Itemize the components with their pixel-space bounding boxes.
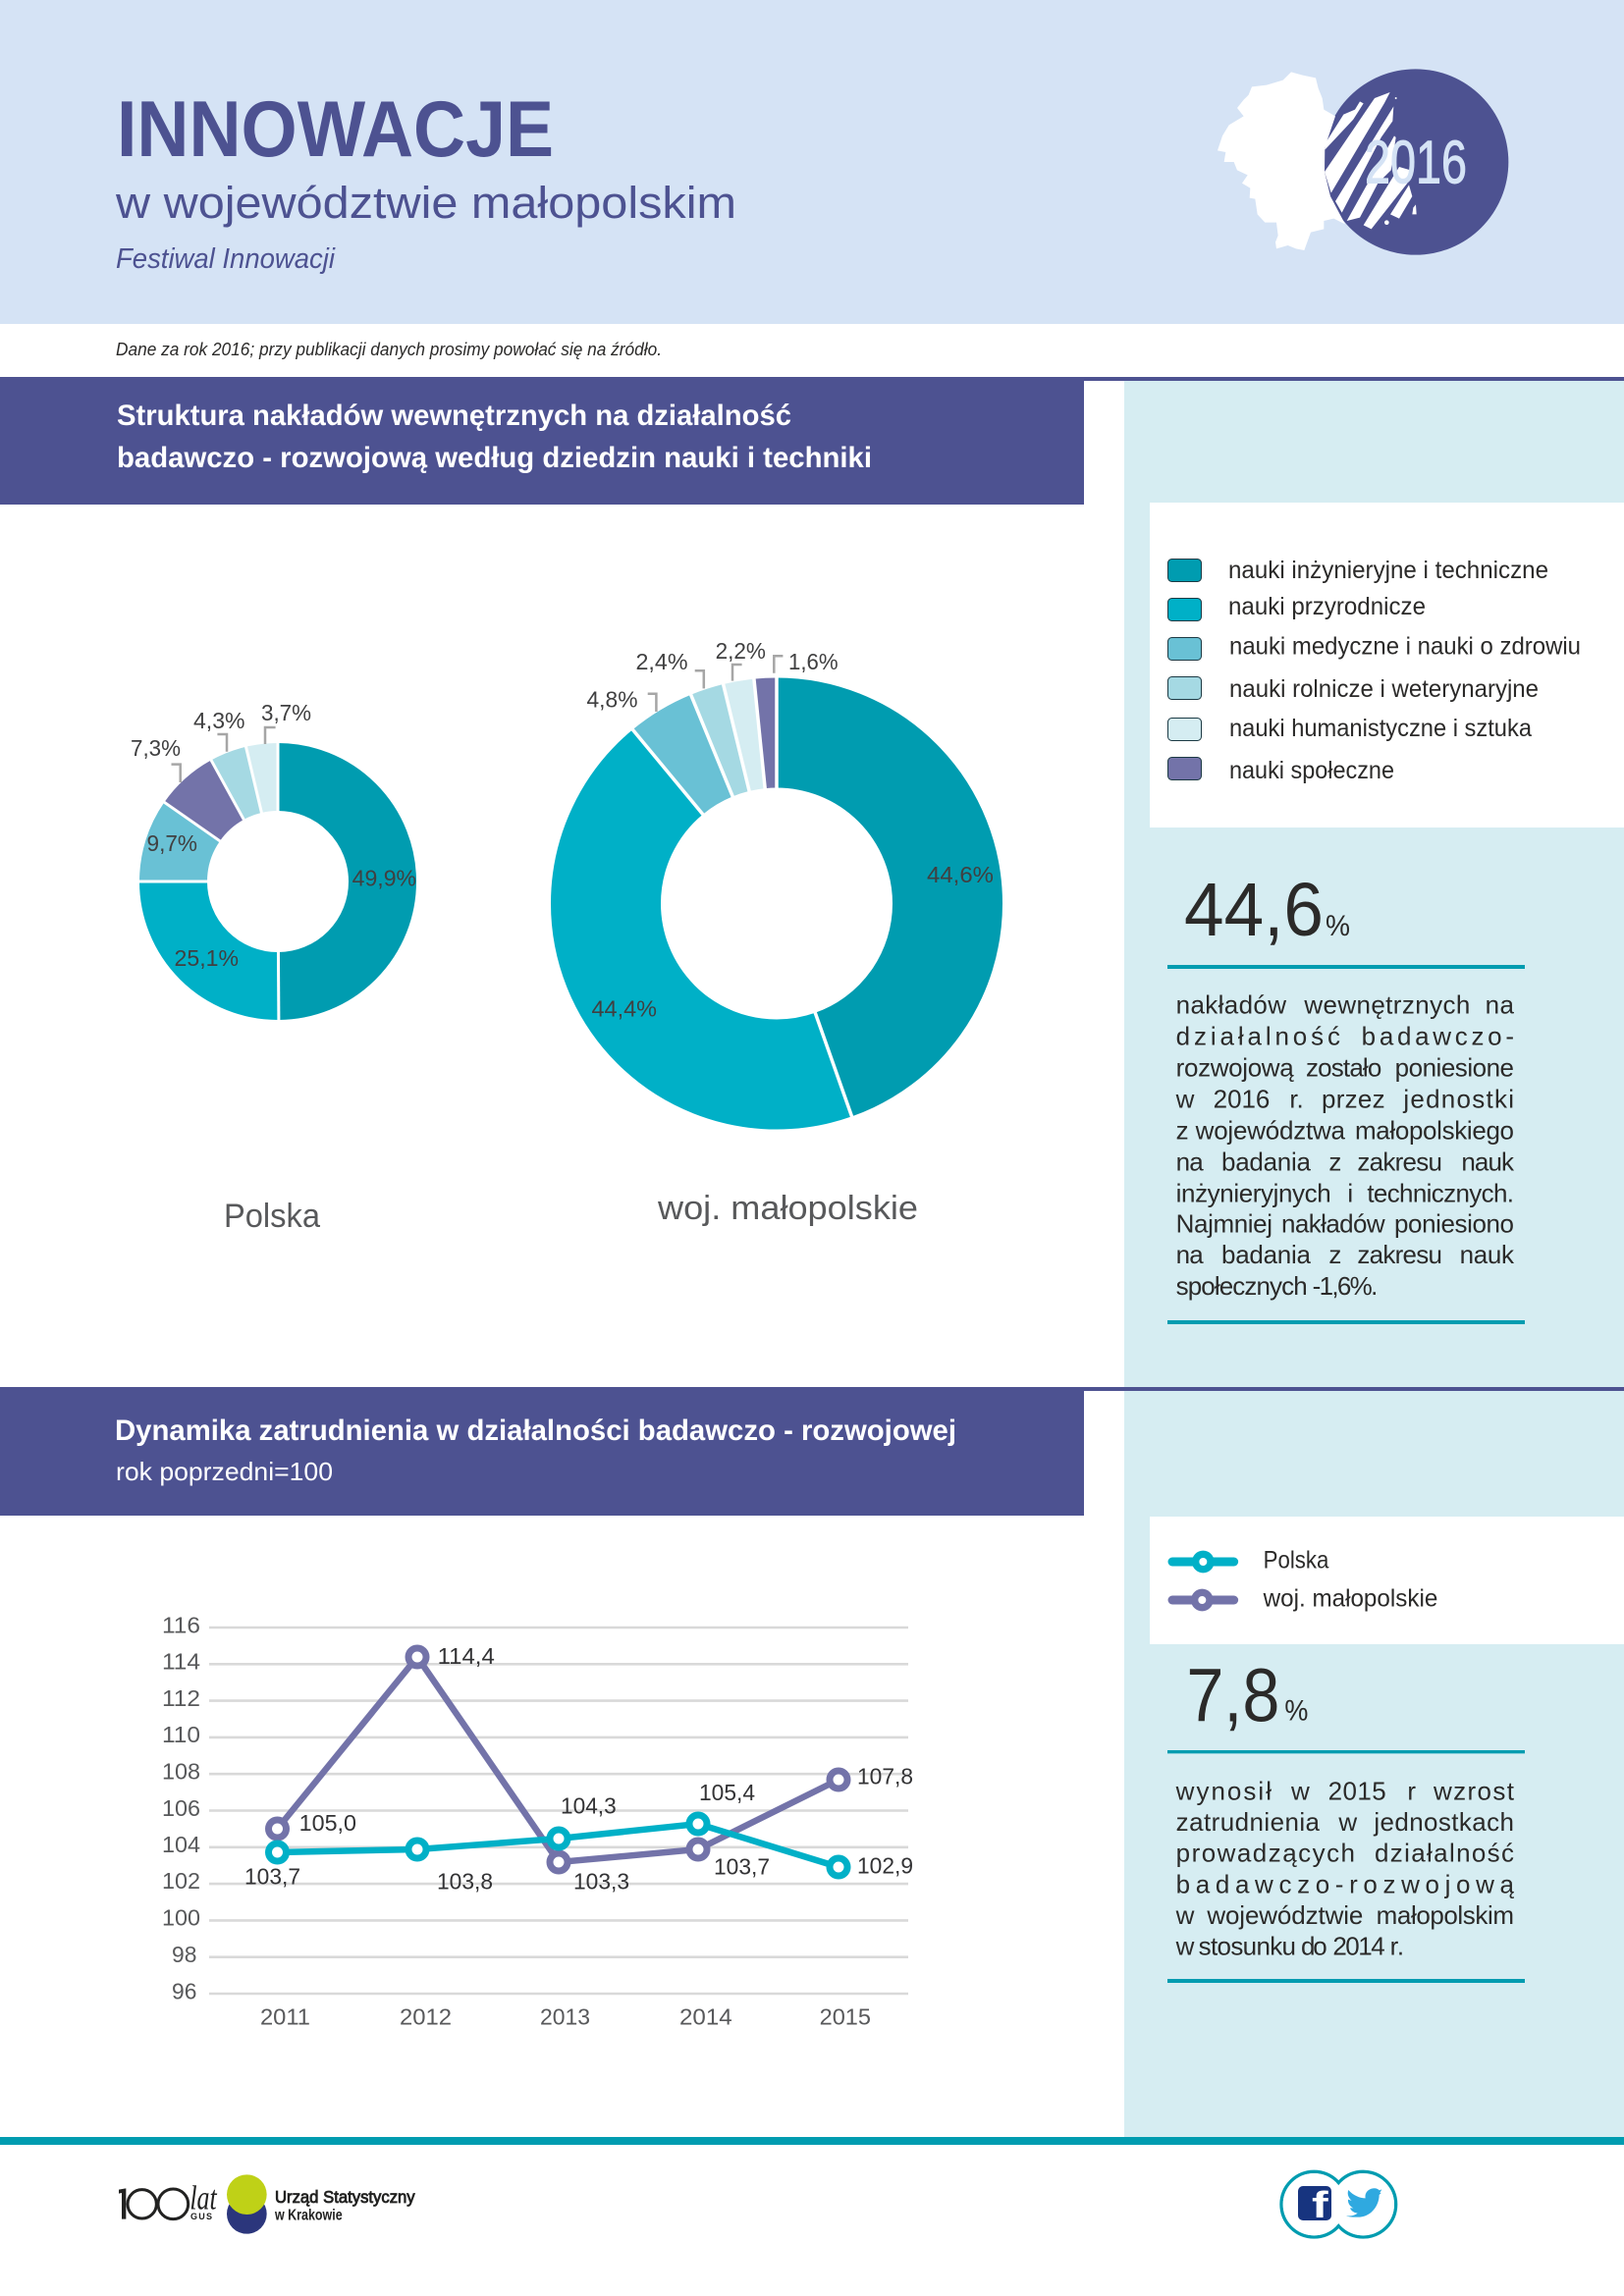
- text block: 44,6% description: nakładów: [1281, 1208, 1385, 1238]
- text block: 44,6% description: społecznych: [1176, 1271, 1308, 1301]
- data labels: 105,0: [299, 1810, 356, 1836]
- logo: Urząd Statystyczny w Krakowie: Urząd Statystyczny: [275, 2187, 415, 2207]
- text block: 7,8% description: zatrudnienia: [1176, 1807, 1321, 1837]
- logo: Urząd Statystyczny w Krakowie: w Krakowie: [274, 2208, 343, 2224]
- donut chart: woj. małopolskie: 1,6%: [788, 649, 839, 674]
- legend item: Polska: Polska: [1264, 1546, 1329, 1574]
- x axis labels: [260, 2004, 871, 2030]
- text block: 7,8% description: małopolskim: [1377, 1900, 1514, 1930]
- text block: 44,6% description: [1175, 989, 1515, 1301]
- text block: 44,6% description: zostało: [1306, 1053, 1381, 1083]
- text block: 7,8% description: w: [1175, 1900, 1195, 1930]
- chart caption: Polska: Polska: [224, 1198, 320, 1235]
- text block: 44,6% description: na: [1176, 1147, 1204, 1176]
- data labels: 102,9: [857, 1852, 913, 1878]
- text block: 44,6% description: inżynieryjnych: [1176, 1178, 1331, 1207]
- text block: 44,6% description: w: [1175, 1085, 1195, 1114]
- donut chart: woj. małopolskie: 2,2%: [716, 638, 766, 664]
- logo: 100 lat GUS: lat: [189, 2179, 218, 2217]
- text block: 44,6% description: nauk: [1460, 1240, 1515, 1269]
- logo: Urząd Statystyczny w Krakowie: [227, 2174, 415, 2234]
- x axis labels: 2014: [679, 2004, 732, 2030]
- callout: 7,8%: 7,8: [1186, 1653, 1279, 1737]
- text block: 7,8% description: 2014: [1332, 1932, 1385, 1961]
- title: INNOWACJE: [117, 85, 554, 174]
- legend item: medical: nauki medyczne i nauki o zdrowiu: [1229, 633, 1581, 661]
- data labels: 104,3: [561, 1792, 617, 1818]
- donut chart: Polska: 49,9%: [352, 866, 416, 891]
- chart caption: woj. małopolskie: woj. małopolskie: [657, 1190, 918, 1227]
- text block: 7,8% description: jednostkach: [1373, 1807, 1514, 1837]
- event name: Festiwal Innowacji: [116, 243, 336, 275]
- text block: 44,6% description: badania: [1221, 1147, 1312, 1176]
- donut chart: Polska: 7,3%: [131, 735, 181, 761]
- subheading: rok poprzedni=100: [116, 1457, 333, 1486]
- line chart: employment dynamics: [162, 1612, 913, 2030]
- icon: facebook: f: [1312, 2184, 1328, 2226]
- donut chart: woj. małopolskie: 4,8%: [587, 686, 638, 712]
- text block: 44,6% description: -1,6%.: [1313, 1271, 1378, 1301]
- y axis labels: 104: [162, 1832, 200, 1857]
- callout: 44,6%: 44,6: [1184, 868, 1324, 952]
- text block: 7,8% description: działalność: [1375, 1839, 1514, 1868]
- donut chart: woj. małopolskie: 44,6%: [927, 862, 994, 887]
- text block: 44,6% description: rozwojową: [1176, 1053, 1294, 1083]
- panel: line chart legend: [1150, 1517, 1624, 1644]
- text block: 44,6% description: jednostki: [1402, 1085, 1514, 1114]
- legend item: social: nauki społeczne: [1229, 757, 1394, 784]
- y axis labels: 96: [172, 1979, 196, 2004]
- text block: 44,6% description: nakładów: [1176, 989, 1286, 1019]
- data labels: 114,4: [438, 1643, 495, 1669]
- x axis labels: 2013: [540, 2004, 590, 2030]
- donut chart: woj. małopolskie: 2,4%: [636, 649, 687, 674]
- text block: 7,8% description: w: [1337, 1807, 1357, 1837]
- text block: 44,6% description: zakresu: [1357, 1240, 1442, 1269]
- text block: 44,6% description: małopolskiego: [1355, 1115, 1514, 1145]
- text block: 7,8% description: stosunku: [1199, 1932, 1296, 1961]
- text block: 44,6% description: działalność: [1176, 1021, 1340, 1050]
- data labels: 107,8: [857, 1764, 913, 1789]
- text block: 44,6% description: 2016: [1214, 1085, 1270, 1114]
- series: Polska: [269, 1815, 847, 1876]
- data labels: 103,3: [573, 1868, 629, 1894]
- text block: 44,6% description: badania: [1221, 1240, 1312, 1269]
- text block: 7,8% description: wzrost: [1433, 1776, 1515, 1805]
- icon: social media facebook and twitter: [1281, 2171, 1396, 2237]
- legend item: woj. małopolskie: [1172, 1585, 1437, 1613]
- y axis labels: 102: [162, 1868, 200, 1894]
- text block: 44,6% description: Najmniej: [1176, 1208, 1272, 1238]
- donut chart: woj. małopolskie: [587, 638, 994, 1120]
- marker: woj. małopolskie 2014: [689, 1841, 707, 1858]
- donut chart: Polska: 25,1%: [175, 945, 239, 971]
- text block: 44,6% description: województwa: [1195, 1115, 1346, 1145]
- text block: 44,6% description: zakresu: [1357, 1147, 1442, 1176]
- callout: 7,8%: [1167, 1653, 1525, 1983]
- text block: 44,6% description: na: [1176, 1240, 1204, 1269]
- icon: region map and year badge: [1218, 69, 1508, 255]
- donut chart: Polska: 3,7%: [261, 700, 311, 725]
- legend item: woj. małopolskie: woj. małopolskie: [1263, 1585, 1437, 1613]
- y axis labels: 116: [162, 1612, 200, 1637]
- y axis labels: 114: [162, 1649, 200, 1675]
- footer rule: [0, 2137, 1624, 2145]
- legend item: engineering: nauki inżynieryjne i techniczne: [1228, 557, 1548, 584]
- text block: 7,8% description: w: [1175, 1932, 1195, 1961]
- icon: twitter bird: [1346, 2188, 1381, 2217]
- subtitle: w województwie małopolskim: [115, 178, 736, 228]
- text block: 44,6% description: z: [1328, 1147, 1341, 1176]
- text block: 44,6% description: poniesione: [1395, 1053, 1514, 1083]
- icon: region map and year badge: 2016: [1365, 130, 1467, 197]
- y axis labels: 110: [162, 1722, 200, 1747]
- text block: 44,6% description: przez: [1322, 1085, 1385, 1114]
- y axis labels: 100: [162, 1905, 200, 1931]
- text block: 7,8% description: prowadzących: [1176, 1839, 1355, 1868]
- heading line 1: Struktura nakładów wewnętrznych na działalność: [117, 400, 791, 432]
- legend item: humanities: nauki humanistyczne i sztuka: [1229, 715, 1532, 742]
- data labels: [244, 1643, 913, 1894]
- x axis labels: 2012: [400, 2004, 452, 2030]
- text block: 44,6% description: wewnętrznych: [1303, 989, 1470, 1019]
- text block: 7,8% description: województwie: [1206, 1900, 1363, 1930]
- series: woj. małopolskie: [269, 1648, 847, 1871]
- text block: 7,8% description: wynosił: [1175, 1776, 1272, 1805]
- text block: 44,6% description: nauk: [1461, 1147, 1515, 1176]
- x axis labels: 2011: [260, 2004, 310, 2030]
- logo: 100 lat GUS: [119, 2179, 218, 2221]
- y axis labels: 108: [162, 1759, 200, 1785]
- text block: 7,8% description: r.: [1390, 1932, 1404, 1961]
- text block: 7,8% description: 2015: [1328, 1776, 1386, 1805]
- panel: section 2 heading: [0, 1387, 1624, 1516]
- panel: page header band: [0, 0, 1624, 324]
- text block: 44,6% description: r.: [1289, 1085, 1304, 1114]
- text block: 7,8% description: [1175, 1776, 1515, 1961]
- panel: legend, science fields: [1150, 503, 1624, 828]
- heading line 2: badawczo - rozwojową według dziedzin nauki i techniki: [117, 442, 872, 474]
- source note: Dane za rok 2016; przy publikacji danych prosimy powołać się na źródło.: [116, 340, 662, 359]
- y axis labels: 112: [162, 1685, 200, 1711]
- panel: right sidebar: [1124, 381, 1624, 2138]
- x axis labels: 2015: [820, 2004, 871, 2030]
- data labels: 103,7: [244, 1863, 300, 1889]
- donut chart: Polska: 9,7%: [147, 830, 197, 856]
- y axis labels: 106: [162, 1795, 200, 1821]
- callout: 7,8%: %: [1284, 1695, 1308, 1728]
- text block: 7,8% description: r: [1407, 1776, 1416, 1805]
- donut chart: woj. małopolskie: 44,4%: [591, 996, 657, 1022]
- legend item: social: [1168, 757, 1394, 784]
- text block: 44,6% description: z: [1328, 1240, 1341, 1269]
- text block: 7,8% description: w: [1290, 1776, 1310, 1805]
- legend item: agricultural: nauki rolnicze i weterynaryjne: [1229, 675, 1539, 703]
- text block: 44,6% description: na: [1486, 989, 1515, 1019]
- text block: 44,6% description: badawczo-: [1362, 1021, 1514, 1050]
- donut chart: Polska: 4,3%: [193, 708, 245, 733]
- callout: 44,6%: %: [1326, 910, 1350, 942]
- data labels: 105,4: [699, 1780, 755, 1805]
- text block: 44,6% description: z: [1176, 1115, 1189, 1145]
- heading: Dynamika zatrudnienia w działalności badawczo - rozwojowej: [115, 1415, 956, 1447]
- text block: 44,6% description: i: [1347, 1178, 1353, 1207]
- logo: 100 lat GUS: GUS: [190, 2212, 212, 2221]
- y axis labels: 98: [172, 1942, 196, 1967]
- donut chart: Polska: [131, 700, 416, 1025]
- y axis labels: [162, 1612, 200, 2004]
- data labels: 103,8: [437, 1868, 493, 1894]
- data labels: 103,7: [714, 1853, 770, 1879]
- callout: 44,6%: [1167, 868, 1525, 1324]
- text block: 7,8% description: do: [1301, 1932, 1327, 1961]
- panel: section 1 heading: [0, 377, 1624, 505]
- legend item: natural sciences: nauki przyrodnicze: [1228, 593, 1426, 620]
- text block: 44,6% description: poniesiono: [1394, 1208, 1514, 1238]
- legend item: Polska: [1172, 1546, 1329, 1574]
- text block: 44,6% description: technicznych.: [1367, 1178, 1514, 1207]
- text block: 7,8% description: badawczo-rozwojową: [1176, 1869, 1515, 1898]
